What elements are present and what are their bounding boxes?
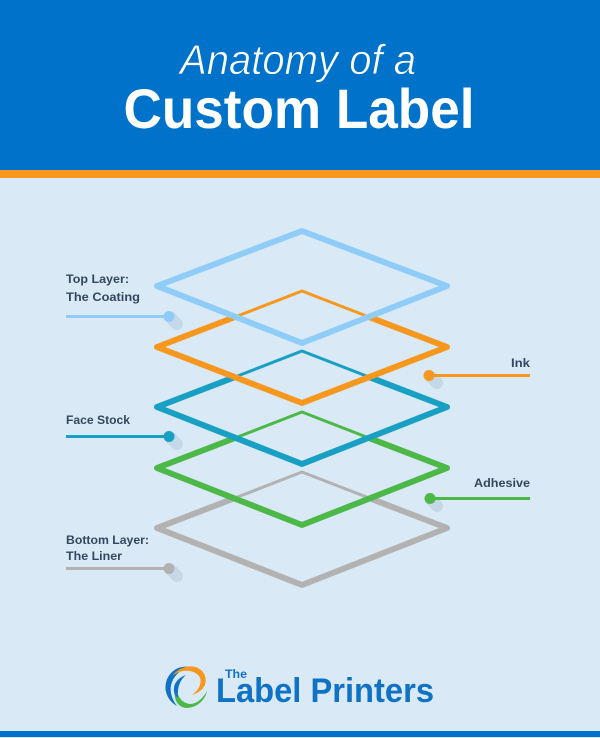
title [124,36,474,140]
header band [0,0,600,178]
icon: swirl [166,666,207,708]
callout: ink: Ink [511,358,531,370]
callout: bottom layer: Bottom Layer: [66,535,149,547]
layer: ink [157,291,447,403]
title: Anatomy of a [177,36,416,83]
layer: face stock [157,351,447,464]
callout: top layer: The Coating [66,292,140,304]
callout: face stock: Face Stock [66,415,131,427]
callout: bottom layer: The Liner [66,551,123,563]
callout: adhesive: Adhesive [474,478,530,490]
layer: adhesive [157,412,447,525]
logo [166,666,434,710]
callout: face stock [66,415,174,442]
wordmark: The [225,669,247,681]
callout: bottom layer [66,535,174,574]
callout: ink [424,358,531,381]
layer: top coating [157,231,447,343]
layer: bottom liner [157,472,447,585]
wordmark: Label Printers [216,672,434,710]
title: Custom Label [124,77,474,140]
callout: top layer: Top Layer: [66,274,129,286]
footer bar [0,731,600,737]
shadows of connector dots [171,318,437,576]
callout: adhesive [424,478,530,504]
callout: top layer [66,274,174,322]
